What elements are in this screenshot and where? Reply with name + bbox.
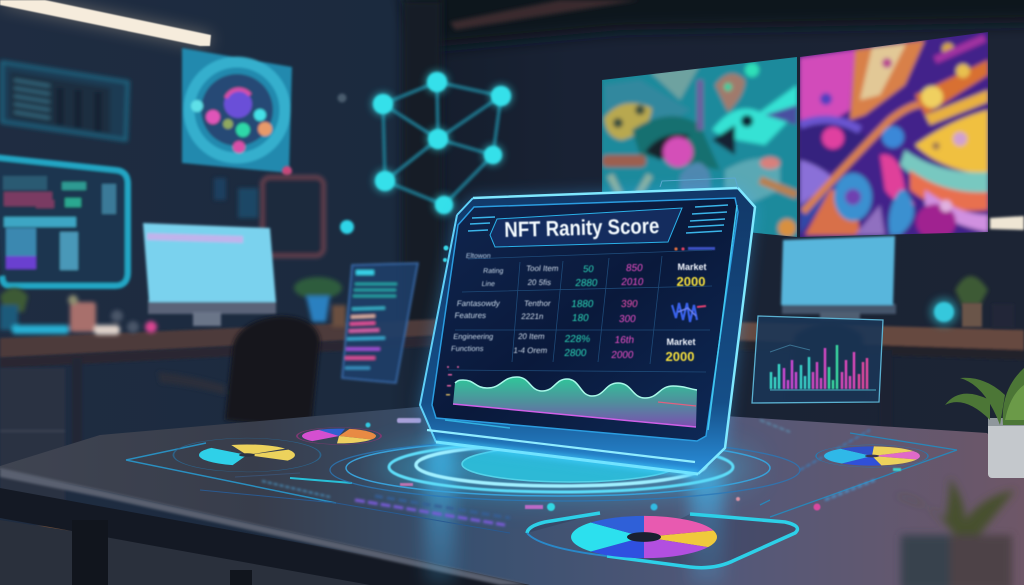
table HUD outlines <box>126 433 957 533</box>
table row 3: Functions <box>451 344 484 353</box>
data table grid <box>448 250 712 372</box>
table row 1: 20 5fis <box>527 278 552 287</box>
big pie chart in frame <box>527 513 797 568</box>
table row 3: 2000 <box>666 349 694 364</box>
table row 1: 2000 <box>677 274 705 289</box>
table row 1: 2010 <box>620 277 645 288</box>
table row 2: Fantasowdy <box>456 299 500 308</box>
table row 2: 390 <box>620 299 639 310</box>
table row 3: Market <box>666 337 696 347</box>
table row 1: Tool Item <box>526 264 559 273</box>
ceiling light <box>0 0 211 46</box>
table row 3 <box>451 332 696 364</box>
hologram: circular NFT art square <box>182 48 292 173</box>
back desk right <box>735 322 1024 430</box>
table row 3: 16th <box>614 335 635 346</box>
table row 3: 1-4 Orem <box>513 346 548 355</box>
table row 2: Features <box>454 311 487 320</box>
cabinet and desk leg <box>0 358 82 546</box>
side light dots <box>443 246 448 262</box>
back desk left <box>0 319 440 368</box>
right wall light <box>990 216 1024 230</box>
second chair <box>785 322 870 400</box>
desk items <box>0 288 157 335</box>
blurred foreground plant and pot <box>895 478 1015 585</box>
small floating data panel <box>342 263 418 383</box>
table row 1: 50 <box>582 264 594 275</box>
panel outer frame <box>420 188 755 474</box>
table row 2: 300 <box>618 314 637 325</box>
ceiling <box>400 0 1024 330</box>
main holographic score panel <box>420 178 755 474</box>
wall panel: red outline frame <box>262 177 324 256</box>
table row 1 <box>465 253 707 289</box>
table row 1: 850 <box>625 263 644 274</box>
table row 2: Tenthor <box>523 299 552 308</box>
table row 3: 20 Item <box>517 332 546 341</box>
table row 2 <box>454 299 639 325</box>
title plate <box>490 208 682 247</box>
potted plant back <box>294 277 346 327</box>
scribble NFT glyph <box>672 303 706 322</box>
pie chart: right table <box>816 445 928 467</box>
title: NFT Ranity Score <box>504 214 660 242</box>
table row 3: 2000 <box>610 350 635 361</box>
decorative floating dots <box>282 94 354 234</box>
pie chart: left table <box>173 438 321 472</box>
table row 2: 2221n <box>521 312 544 321</box>
table row 1: 2880 <box>574 278 599 289</box>
table HUD text lines <box>262 420 875 525</box>
table row 2: 180 <box>571 313 590 324</box>
table row 1: Rating <box>483 268 504 275</box>
table row 3: Engineering <box>453 332 494 341</box>
holographic rings on table <box>330 439 800 501</box>
artwork: colorful abstract painting <box>798 30 990 240</box>
floating mini bar chart panel <box>752 316 883 403</box>
header decoration lines <box>468 205 728 233</box>
desk items right: plant and orb <box>930 276 1014 328</box>
area line chart <box>446 366 697 427</box>
foreground plant right <box>945 368 1024 478</box>
panel inner surface <box>432 198 738 441</box>
panel edge highlights <box>420 178 755 474</box>
blue tags on wall <box>214 178 258 218</box>
office chair <box>158 316 320 460</box>
table row 1: Line <box>481 281 495 288</box>
artwork: teal abstract painting <box>600 50 800 240</box>
wall panel: cyan framed dashboard <box>0 157 128 286</box>
table row 3: 228% <box>564 334 591 345</box>
back monitor right <box>781 236 896 320</box>
table accent dots <box>366 418 901 511</box>
back monitor <box>143 223 276 326</box>
table row 1: Eltowon <box>465 253 491 260</box>
main table <box>0 407 1024 585</box>
table row 2: 1880 <box>570 299 595 310</box>
network graph hologram <box>372 71 512 215</box>
table row 3: 2800 <box>563 348 588 359</box>
pie chart: rear table <box>297 428 381 444</box>
legend dots <box>674 247 715 251</box>
wall panel: dark teal data screen <box>2 62 128 140</box>
table row 1: Market <box>677 262 707 272</box>
